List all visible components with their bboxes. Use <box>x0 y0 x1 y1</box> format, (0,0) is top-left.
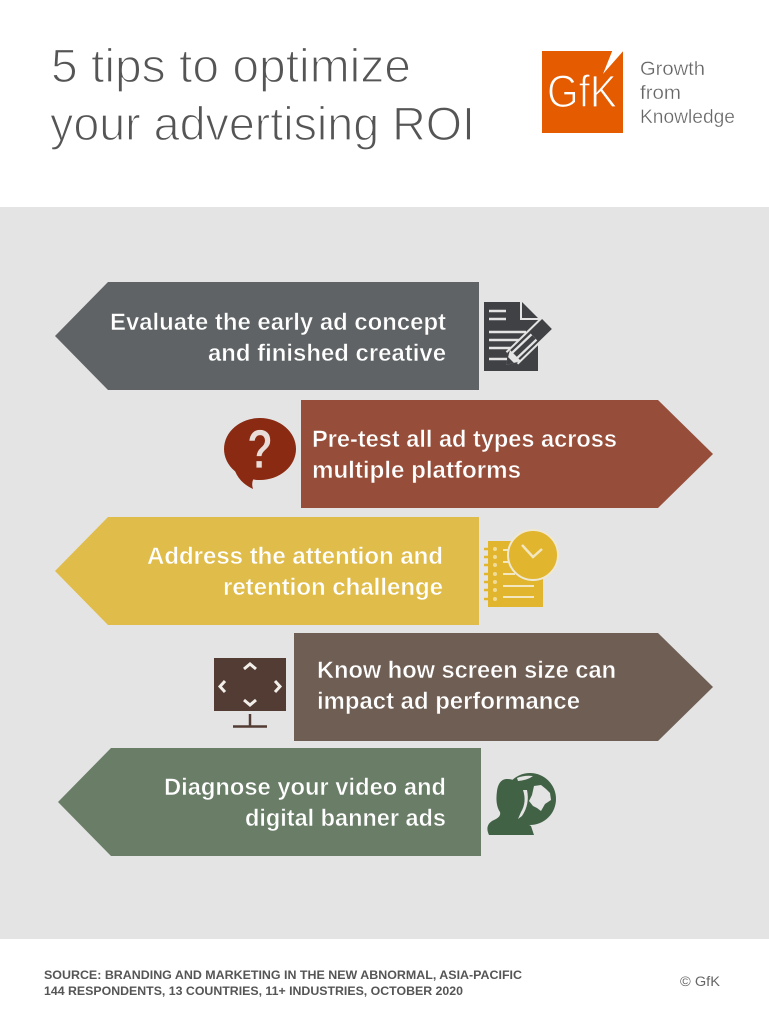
icon: person and globe <box>487 773 556 835</box>
title <box>50 39 475 150</box>
GfK logo <box>542 49 735 133</box>
GfK logo: from <box>640 83 681 104</box>
arrow 4: screen size: impact ad performance <box>317 688 580 715</box>
arrow 5: diagnose <box>58 748 481 856</box>
icon: document and pencil <box>484 302 547 371</box>
arrow 5: diagnose: Diagnose your video and <box>164 774 446 801</box>
copyright: © GfK <box>680 974 720 989</box>
arrow 1: evaluate <box>55 282 479 390</box>
arrow 2: pre-test <box>301 400 713 508</box>
footer source <box>44 968 522 998</box>
arrow 1: evaluate: and finished creative <box>208 340 446 367</box>
icon: question bubble <box>224 418 296 489</box>
arrow 5: diagnose: digital banner ads <box>245 805 446 832</box>
arrow 2: pre-test: multiple platforms <box>312 457 521 484</box>
arrow 1: evaluate: Evaluate the early ad concept <box>110 309 446 336</box>
icon: notebook and clock <box>484 530 558 607</box>
arrow 4: screen size: Know how screen size can <box>317 657 616 684</box>
arrow 3: attention: retention challenge <box>223 574 443 601</box>
icon: question bubble: ? <box>247 418 273 480</box>
GfK logo: Knowledge <box>640 107 735 128</box>
GfK logo: GfK <box>547 66 617 117</box>
GfK logo: Growth <box>640 59 705 80</box>
icon: monitor <box>214 658 286 727</box>
arrow 4: screen size <box>294 633 713 741</box>
grey panel <box>0 207 769 939</box>
title: your advertising ROI <box>50 97 475 150</box>
footer source: SOURCE: BRANDING AND MARKETING IN THE NEW ABNORMAL, ASIA-PACIFIC <box>44 968 522 982</box>
footer source: 144 RESPONDENTS, 13 COUNTRIES, 11+ INDUSTRIES, OCTOBER 2020 <box>44 984 463 998</box>
title: 5 tips to optimize <box>51 39 411 92</box>
arrow 3: attention <box>55 517 479 625</box>
arrow 3: attention: Address the attention and <box>147 543 443 570</box>
arrow 2: pre-test: Pre-test all ad types across <box>312 426 617 453</box>
